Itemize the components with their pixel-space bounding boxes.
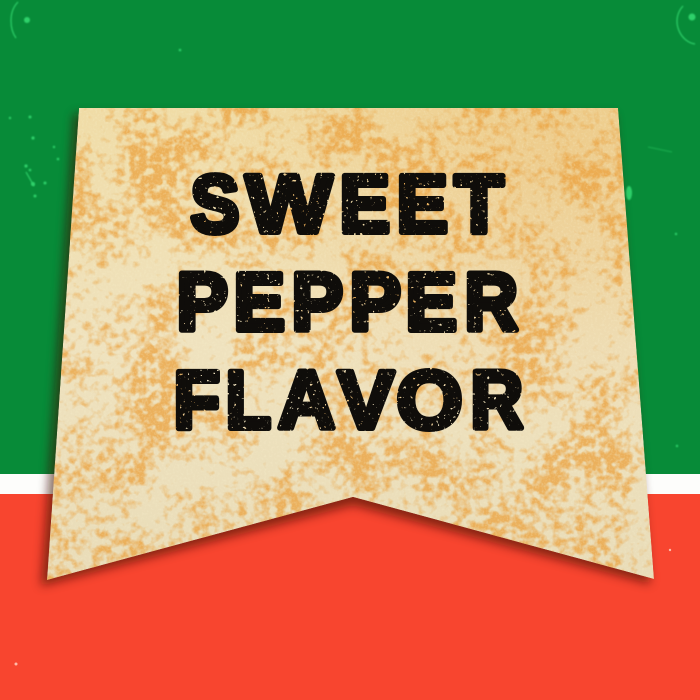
heading line: flavor: L	[226, 355, 271, 446]
heading line: pepper: P	[292, 257, 343, 348]
heading line: pepper: E	[406, 257, 457, 348]
heading line: flavor: A	[278, 355, 335, 446]
heading line: pepper: P	[176, 257, 228, 348]
heading line: pepper: E	[234, 257, 285, 348]
heading line: sweet: W	[246, 159, 333, 250]
heading line: flavor: O	[396, 355, 462, 446]
paper banner	[40, 100, 660, 590]
background: red band	[0, 494, 700, 700]
heading line: flavor: R	[470, 355, 523, 446]
banner drop shadow	[41, 114, 650, 586]
heading line: sweet: S	[190, 159, 240, 250]
heading line: pepper: R	[464, 257, 518, 348]
heading line: sweet: E	[340, 159, 390, 250]
heading line: sweet: T	[454, 159, 504, 250]
heading line: sweet: E	[396, 159, 448, 250]
background: white stripe	[0, 474, 700, 494]
heading line: flavor: V	[338, 355, 394, 446]
heading: sweet pepper flavor	[174, 159, 523, 446]
heading line: flavor: F	[174, 355, 220, 446]
heading line: pepper: P	[350, 257, 401, 348]
background: green band	[0, 0, 700, 474]
background scuffs: green specks	[9, 14, 696, 447]
